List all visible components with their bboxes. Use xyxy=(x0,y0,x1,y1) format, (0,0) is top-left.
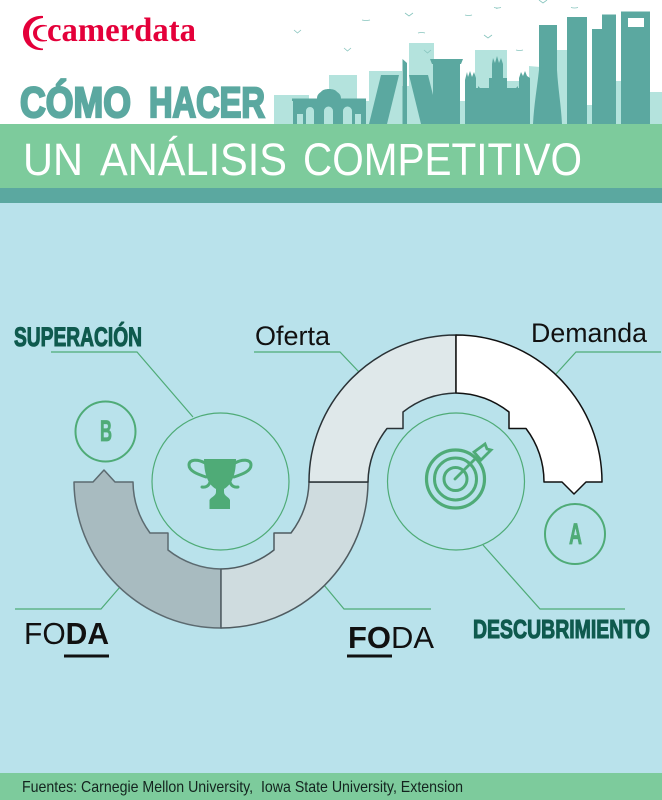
footer sources: Fuentes: Carnegie Mellon University, Iowa State University, Extension xyxy=(22,779,463,796)
title band shadow xyxy=(0,188,662,203)
title band xyxy=(0,124,662,188)
icon: target xyxy=(426,444,491,508)
circle: descubrimiento xyxy=(388,413,524,550)
wide tower xyxy=(430,59,463,124)
tower 2 xyxy=(592,14,616,124)
title line 2: COMPETITIVO xyxy=(303,134,582,185)
label: superacion: SUPERACIÓN xyxy=(14,321,142,352)
tower 3 with window xyxy=(621,12,650,124)
segment: demanda xyxy=(456,335,602,494)
tower 1 xyxy=(567,17,587,124)
birds xyxy=(294,0,578,53)
circle: superacion xyxy=(152,413,289,550)
title line 2: ANÁLISIS xyxy=(100,134,287,185)
label: oferta: Oferta xyxy=(255,321,331,351)
segment: F O xyxy=(221,482,368,628)
badge: B: B xyxy=(100,415,112,448)
logo xyxy=(23,12,196,50)
title line 2 xyxy=(23,134,582,185)
title line 1 xyxy=(20,78,265,127)
segment: D A xyxy=(74,470,221,628)
title line 2: UN xyxy=(23,134,83,185)
flared tower xyxy=(533,25,562,124)
palace xyxy=(465,56,530,124)
logo mark xyxy=(23,16,47,50)
skyline xyxy=(274,0,662,124)
icon: trophy xyxy=(189,459,251,509)
title line 1: CÓMO xyxy=(20,78,131,127)
puerta de alcala xyxy=(292,89,366,124)
footer band xyxy=(0,773,662,800)
badge: A: A xyxy=(569,518,582,551)
label: foda right: FODA xyxy=(348,620,434,655)
segment: oferta xyxy=(309,335,456,482)
leaning towers xyxy=(369,59,433,124)
skyline background buildings xyxy=(274,43,662,124)
label: foda left: FODA xyxy=(24,616,109,651)
badge: B xyxy=(76,402,136,462)
label: demanda: Demanda xyxy=(531,318,648,348)
badge: A xyxy=(545,504,605,564)
title line 1: HACER xyxy=(149,79,265,127)
logo wordmark: camerdata xyxy=(47,12,196,49)
leader lines xyxy=(15,352,661,609)
